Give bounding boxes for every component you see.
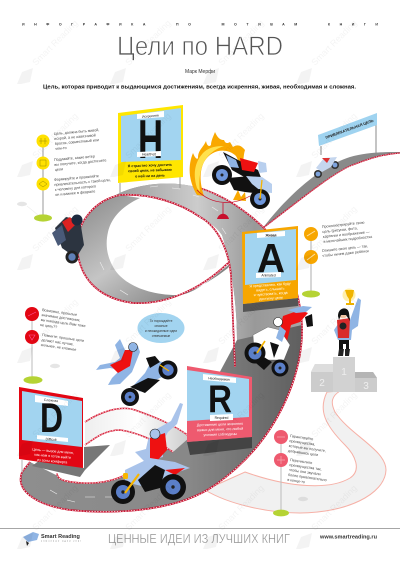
watermark: Smart Reading [30, 204, 80, 253]
captions: R: в конце-то [287, 478, 305, 484]
sign: H heartfelt: Искренняя [142, 113, 159, 119]
captions: D [24, 307, 87, 384]
watermark: Smart Reading [30, 111, 80, 160]
bubble: и неожиданные идеи [145, 329, 177, 333]
sign: R required: Достижение цели жизненно [197, 422, 243, 427]
captions: A: чтобы ничем даже ребёнок [322, 249, 369, 258]
goal banner [318, 113, 377, 156]
sign: A animated: видеть, слышать [256, 287, 285, 292]
sign: H heartfelt: HeartFelt [142, 152, 156, 156]
watermark: Smart Reading [123, 483, 173, 532]
watermark: Smart Reading [123, 204, 173, 253]
captions: R: которые вы получите, [288, 444, 326, 453]
captions: H: он и важнее в феврале [55, 189, 95, 197]
captions: H: цели [55, 167, 63, 172]
footer: ключевые идеи книг [41, 540, 81, 542]
small motorbike at goal [314, 157, 339, 178]
bubble: опасные [154, 324, 168, 328]
watermark: Smart Reading [216, 297, 266, 346]
captions: R: более привлекательно [288, 473, 327, 482]
captions: R: Гарантируйте [290, 434, 314, 441]
sign: D difficult: Difficult [45, 437, 57, 442]
sign: R required: важно для меня, что любой [197, 427, 243, 432]
captions: A: цель (рисунки, фото, [322, 226, 358, 234]
fire ring [190, 132, 250, 219]
captions: H: чем-то [55, 146, 67, 151]
captions: H: вы получите, когда достигнете [54, 158, 107, 167]
motorbike jumping through ring [212, 152, 272, 209]
watermark: Smart Reading [309, 111, 359, 160]
sign: A animated: и чувствовать, когда [254, 291, 288, 297]
watermark: Smart Reading [123, 390, 173, 439]
bubble: То порождаёте [150, 319, 173, 323]
captions: R: добравшись цели [288, 449, 318, 457]
road: pale finish road [205, 391, 386, 513]
watermark: Smart Reading [123, 297, 173, 346]
captions: H: бросок, совместимый или [55, 138, 99, 146]
sign: D difficult: из зоны комфорта [37, 458, 68, 465]
jumping motorbike and rider [96, 339, 178, 406]
sign: A animated [242, 226, 298, 312]
captions: R: Перечислите [290, 458, 313, 465]
subtitle: Цель, которая приводит к выдающимся достижениям, всегда искренняя, живая, необходимая и сложная. [43, 84, 357, 90]
captions: R [273, 430, 329, 516]
watermark: Smart Reading [216, 111, 266, 160]
captions: D: сильнее, не сложнее [40, 343, 77, 352]
watermark: Smart Reading [30, 18, 80, 67]
captions: D: значимые достижения, [41, 313, 81, 322]
motorbike and rider front [111, 403, 190, 504]
watermark: Smart Reading [123, 111, 173, 160]
watermark: Smart Reading [216, 204, 266, 253]
sign: H heartfelt: о ней ни на день [135, 173, 166, 179]
footer [0, 528, 400, 546]
footer: www.smartreading.ru [319, 534, 377, 540]
captions: A: Проиллюстрируйте свою [322, 221, 365, 229]
captions: A [302, 220, 373, 298]
sign: H heartfelt [118, 105, 183, 193]
author: Марк Мерфи [185, 69, 215, 75]
captions: R: чтобы они звучали [288, 468, 321, 476]
road: white ribbon [57, 408, 190, 483]
captions: R: преимущества, [289, 439, 316, 447]
watermark: Smart Reading [30, 483, 80, 532]
captions: A: Опишите свою цель — так, [322, 244, 368, 253]
road: main spiral [21, 183, 302, 512]
winner with trophy [334, 288, 361, 356]
captions: H: Формируйте и проявляйте [54, 174, 99, 182]
footer: Smart Reading [41, 534, 80, 540]
title: Цели по HARD [117, 31, 283, 61]
podium [311, 357, 377, 392]
captions: D: Возможно, прошлые [42, 308, 77, 317]
captions: H: искрой, а не навязчивой [54, 133, 96, 141]
sign: D difficult: как-нам я готов выйти [34, 453, 71, 460]
bubble: отвечаемые [152, 334, 170, 338]
captions: A: картинки и воображение — [323, 230, 370, 239]
captions: H [17, 128, 112, 222]
road: right branch to goal [263, 152, 400, 228]
captions: D: не цель?? [40, 323, 57, 329]
podium: 1 [341, 367, 347, 378]
sign: H heartfelt: своей цели, не забываю [128, 168, 172, 173]
sign: H heartfelt: H [138, 108, 163, 170]
captions: H: привлекательность к такой цели, [54, 178, 111, 187]
sign: R required [187, 366, 252, 455]
sign: A animated: Живая [264, 234, 277, 238]
watermark: Smart Reading [216, 390, 266, 439]
captions: H: Цель, должна быть живой, [54, 128, 100, 136]
footer: ЦЕННЫЕ ИДЕИ ИЗ ЛУЧШИХ КНИГ [108, 532, 290, 546]
captions: A: в мельчайших подробностях [323, 235, 373, 244]
podium: 2 [319, 378, 325, 389]
sign: D difficult [19, 387, 110, 477]
sign: A animated: A [257, 235, 285, 281]
captions: R: преимущества так, [289, 463, 322, 471]
sign: R required: Необходимая [208, 376, 230, 382]
captions: H: Подумайте, какие ветер [54, 154, 95, 162]
white motorbike with rider [244, 306, 313, 376]
watermark: Smart Reading [123, 18, 173, 67]
sign: H heartfelt: Я страстно хочу достичь [128, 163, 173, 168]
watermark: Smart Reading [309, 483, 359, 532]
watermark: Smart Reading [30, 297, 80, 346]
watermark: Smart Reading [309, 18, 359, 67]
sign: R required: Required [215, 416, 228, 420]
dark motorbike left [52, 214, 84, 264]
sign: R required: условия соблюдены [203, 432, 238, 437]
captions: D: Помните: прошлые цели [42, 333, 84, 343]
sign: A animated: Animated [261, 274, 276, 278]
sign: A animated: Я представляю, как буду [249, 282, 291, 288]
podium: 3 [363, 381, 369, 392]
captions: H: к человеку для которого [55, 184, 96, 192]
sign: D difficult: D [40, 394, 63, 441]
sign: D difficult: Цель — вызов для меня, [32, 447, 74, 455]
sign: A animated: достигну цели [259, 296, 283, 301]
watermark: Smart Reading [309, 390, 359, 439]
watermark: Smart Reading [30, 390, 80, 439]
sign: D difficult: Сложная [44, 398, 58, 403]
watermark: Smart Reading [309, 297, 359, 346]
watermark: Smart Reading [309, 204, 359, 253]
goal banner: ПРИВЛЕКАТЕЛЬНАЯ ЦЕЛЬ [325, 119, 374, 140]
header tagline: ИНФОГРАФИКА ПО МОТИВАМ КНИГИ [22, 22, 378, 26]
bubble [138, 313, 184, 343]
captions: D: делают нас лучше, [41, 338, 74, 346]
captions: D: вы никогда цель Вам тоже [40, 318, 86, 328]
sign: R required: R [208, 378, 232, 421]
watermark: Smart Reading [216, 18, 266, 67]
watermark: Smart Reading [216, 483, 266, 532]
